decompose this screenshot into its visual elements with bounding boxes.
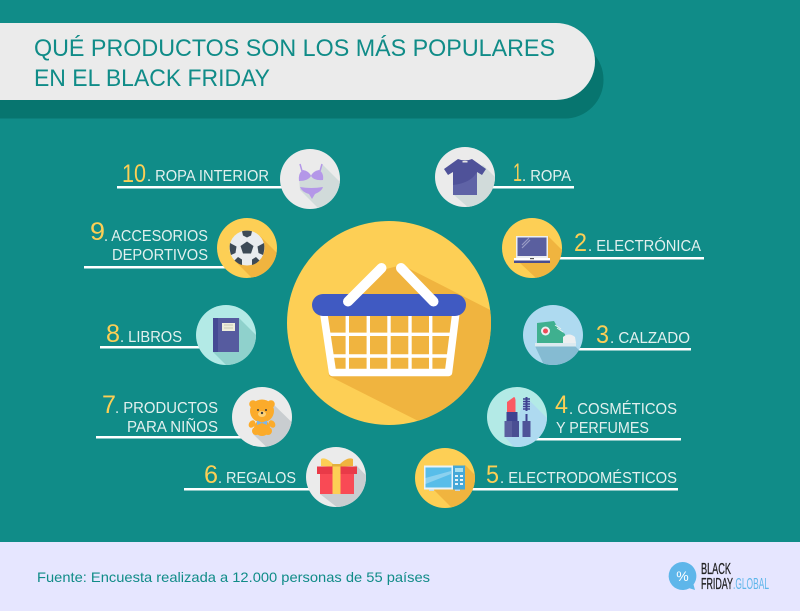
icon: lipstick and mascara bbox=[487, 387, 547, 447]
item 9: accesorios deportivos: . ACCESORIOS bbox=[104, 228, 208, 245]
item 2: electrónica: . ELECTRÓNICA bbox=[588, 238, 702, 255]
item 10: ropa interior: . ROPA INTERIOR bbox=[147, 168, 269, 185]
item 2: electrónica bbox=[502, 218, 704, 278]
icon: laptop bbox=[502, 218, 562, 278]
item 8: libros bbox=[100, 305, 256, 365]
icon: t-shirt bbox=[435, 147, 495, 207]
item 1: ropa: 1 bbox=[513, 159, 522, 187]
item 7: productos para niños: . PRODUCTOS bbox=[115, 400, 218, 417]
logo bbox=[669, 561, 769, 593]
icon: book bbox=[196, 305, 256, 365]
item 10: ropa interior bbox=[117, 149, 340, 209]
icon: gift box bbox=[306, 447, 366, 507]
title bbox=[34, 35, 555, 92]
item 7: productos para niños: PARA NIÑOS bbox=[127, 419, 218, 436]
item 5: electrodomésticos bbox=[415, 448, 678, 508]
item 9: accesorios deportivos: 9 bbox=[90, 218, 105, 246]
logo wordmark: .GLOBAL bbox=[733, 576, 769, 593]
item 10: ropa interior: 10 bbox=[122, 160, 146, 188]
basket rim bbox=[312, 294, 466, 316]
central basket icon bbox=[287, 221, 491, 425]
logo wordmark: FRIDAY bbox=[701, 576, 733, 593]
item 3: calzado: . CALZADO bbox=[610, 330, 690, 347]
item 7: productos para niños bbox=[96, 387, 292, 447]
item 6: regalos bbox=[184, 447, 366, 507]
item 8: libros: . LIBROS bbox=[120, 329, 182, 346]
title banner bbox=[0, 23, 604, 118]
item 4: cosméticos y perfumes bbox=[487, 387, 681, 447]
item 4: cosméticos y perfumes: Y PERFUMES bbox=[556, 420, 649, 437]
item 7: productos para niños: 7 bbox=[102, 391, 116, 419]
icon: bikini bbox=[280, 149, 340, 209]
item 6: regalos: 6 bbox=[204, 461, 218, 489]
icon: sneaker bbox=[523, 305, 583, 365]
icon: percent bubble: % bbox=[676, 568, 689, 584]
icon: teddy bear bbox=[232, 387, 292, 447]
icon: soccer ball bbox=[217, 218, 277, 278]
item 9: accesorios deportivos bbox=[84, 218, 277, 278]
source note: Fuente: Encuesta realizada a 12.000 personas de 55 países bbox=[37, 569, 430, 585]
footer panel bbox=[0, 542, 800, 611]
item 3: calzado: 3 bbox=[596, 321, 609, 349]
item 4: cosméticos y perfumes: 4 bbox=[555, 391, 568, 419]
basket handles bbox=[348, 268, 434, 302]
item 2: electrónica: 2 bbox=[574, 229, 587, 257]
item 9: accesorios deportivos: DEPORTIVOS bbox=[112, 247, 208, 264]
logo wordmark: BLACK bbox=[701, 561, 731, 578]
item 8: libros: 8 bbox=[106, 320, 120, 348]
item 1: ropa bbox=[435, 147, 574, 207]
title: EN EL BLACK FRIDAY bbox=[34, 65, 270, 92]
item 6: regalos: . REGALOS bbox=[218, 470, 296, 487]
basket frame bbox=[324, 312, 456, 372]
title: QUÉ PRODUCTOS SON LOS MÁS POPULARES bbox=[34, 35, 555, 62]
item 3: calzado bbox=[523, 305, 691, 365]
item 5: electrodomésticos: . ELECTRODOMÉSTICOS bbox=[500, 470, 677, 487]
item 1: ropa: . ROPA bbox=[522, 168, 572, 185]
logo wordmark bbox=[701, 561, 769, 593]
item 5: electrodomésticos: 5 bbox=[486, 461, 499, 489]
item 4: cosméticos y perfumes: . COSMÉTICOS bbox=[569, 401, 677, 418]
icon: microwave bbox=[415, 448, 475, 508]
